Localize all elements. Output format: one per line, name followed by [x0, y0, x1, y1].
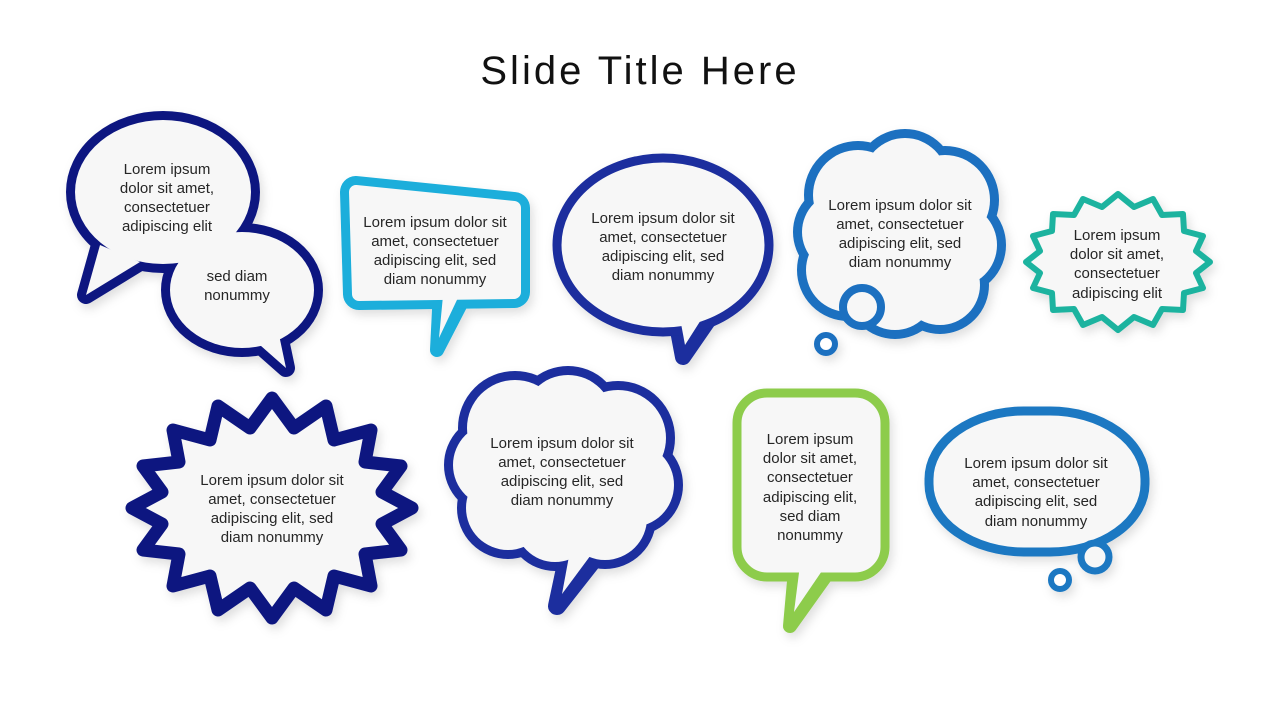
text 8: Lorem ipsum: [767, 431, 853, 448]
text 4: diam nonummy: [849, 254, 952, 271]
text 9: amet, consectetuer: [972, 474, 1100, 491]
text 5: Lorem ipsum: [1074, 227, 1160, 244]
text 8: dolor sit amet,: [763, 450, 857, 467]
text 8: consectetuer: [767, 469, 853, 486]
text 4: adipiscing elit, sed: [839, 235, 961, 252]
bubble 5: teal starburst: [1026, 194, 1210, 330]
text 1: Lorem ipsum: [124, 161, 210, 178]
text 8: nonummy: [777, 527, 843, 544]
bubble 4: thought cloud: [802, 138, 997, 353]
text 8: sed diam: [780, 508, 840, 525]
text 7: diam nonummy: [511, 492, 614, 509]
text 1: dolor sit amet,: [120, 180, 214, 197]
text 2: diam nonummy: [384, 271, 487, 288]
text 2: Lorem ipsum dolor sit: [363, 214, 508, 231]
bubble 9: rounded thought: [929, 411, 1145, 589]
text 5: consectetuer: [1074, 265, 1160, 282]
text 4: Lorem ipsum dolor sit: [828, 197, 973, 214]
text 7: amet, consectetuer: [498, 454, 626, 471]
text 5: adipiscing elit: [1072, 285, 1163, 302]
text 6: Lorem ipsum dolor sit: [200, 472, 345, 489]
bubble 1: double speech: [75, 120, 314, 368]
text 2: amet, consectetuer: [371, 233, 499, 250]
text 1: sed diam: [207, 268, 267, 285]
text 6: adipiscing elit, sed: [211, 510, 333, 527]
text 9: diam nonummy: [985, 513, 1088, 530]
text 6: diam nonummy: [221, 529, 324, 546]
text 9: adipiscing elit, sed: [975, 493, 1097, 510]
text 9: Lorem ipsum dolor sit: [964, 455, 1109, 472]
text 3: amet, consectetuer: [599, 229, 727, 246]
bubble 2: cyan rectangle speech: [356, 192, 514, 350]
text 3: diam nonummy: [612, 267, 715, 284]
bubble 7: cloud speech: [453, 375, 674, 606]
text 1: consectetuer: [124, 199, 210, 216]
text 1: nonummy: [204, 287, 270, 304]
text 3: adipiscing elit, sed: [602, 248, 724, 265]
title: Slide Title Here: [480, 49, 800, 93]
text 1: adipiscing elit: [122, 218, 213, 235]
text 3: Lorem ipsum dolor sit: [591, 210, 736, 227]
bubble 3: oval speech: [557, 158, 769, 357]
text 6: amet, consectetuer: [208, 491, 336, 508]
text 8: adipiscing elit,: [763, 489, 857, 506]
bubble 6: navy spiky star: [132, 398, 412, 618]
text 7: Lorem ipsum dolor sit: [490, 435, 635, 452]
text 5: dolor sit amet,: [1070, 246, 1164, 263]
text 2: adipiscing elit, sed: [374, 252, 496, 269]
text 7: adipiscing elit, sed: [501, 473, 623, 490]
bubble 8: green rounded speech: [737, 393, 885, 626]
text 4: amet, consectetuer: [836, 216, 964, 233]
